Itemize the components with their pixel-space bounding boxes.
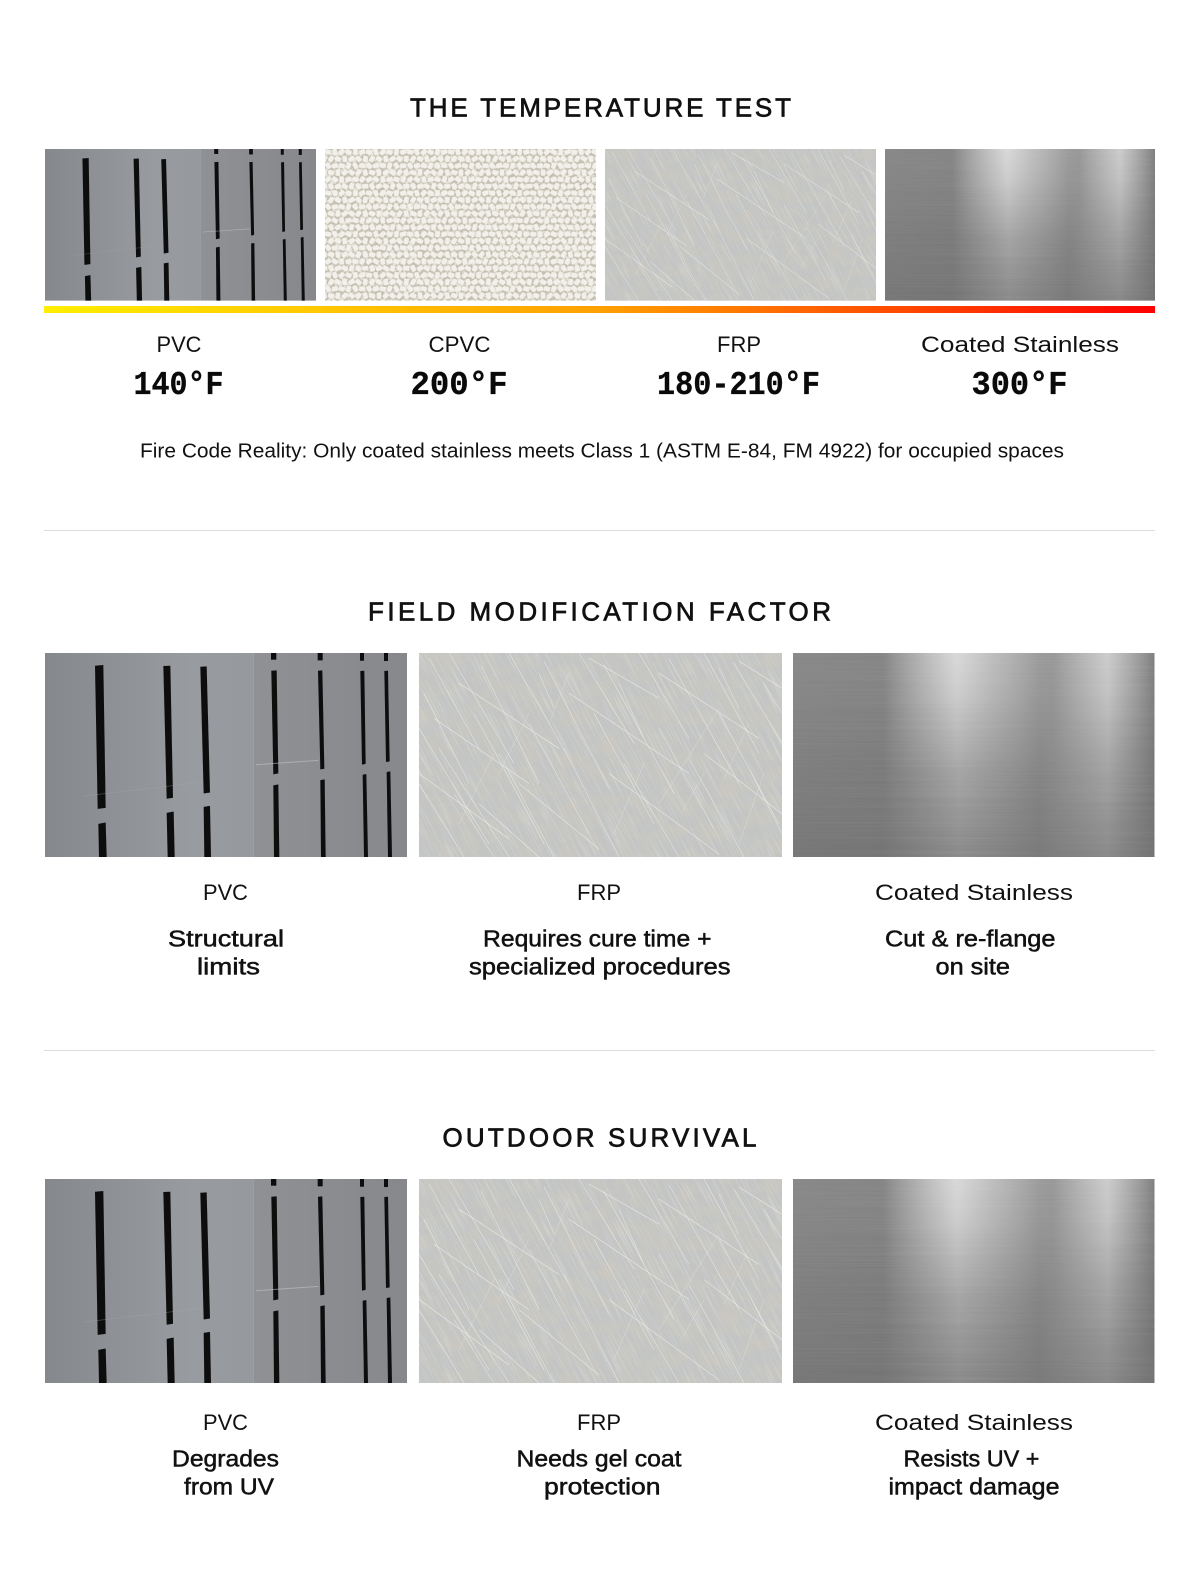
column: FRP outdoor note bbox=[516, 1410, 682, 1500]
image: FRP fiberglass bbox=[331, 1025, 869, 1536]
panel: field modification factor bbox=[45, 499, 1154, 1010]
column: PVC field note: limits bbox=[197, 954, 260, 980]
column: FRP field note: FRP bbox=[577, 880, 621, 905]
column: CPVC temperature: CPVC bbox=[428, 332, 491, 357]
fire code note: Fire Code Reality: Only coated stainless meets Class 1 (ASTM E-84, FM 4922) for occupied spaces bbox=[140, 440, 1064, 462]
temperature gradient bar bbox=[44, 306, 1155, 313]
image: coated stainless bbox=[793, 653, 1154, 857]
column: PVC field note bbox=[168, 880, 284, 980]
column: PVC field note: PVC bbox=[203, 880, 248, 905]
column: CPVC temperature bbox=[410, 332, 508, 404]
column: PVC temperature: PVC bbox=[156, 332, 202, 357]
column: FRP outdoor note: FRP bbox=[577, 1410, 621, 1435]
image: FRP fiberglass bbox=[539, 34, 941, 415]
column: FRP outdoor note: Needs gel coat bbox=[516, 1446, 682, 1472]
column: PVC temperature bbox=[134, 332, 224, 404]
column: coated stainless outdoor note: impact damage bbox=[888, 1474, 1060, 1500]
image: PVC panel bbox=[45, 653, 407, 857]
column: CPVC temperature: 200°F bbox=[410, 367, 508, 404]
column: FRP temperature: 180-210°F bbox=[657, 367, 820, 404]
column: PVC field note: Structural bbox=[168, 926, 284, 952]
column: coated stainless temperature: Coated Stainless bbox=[921, 332, 1119, 357]
column: FRP outdoor note: protection bbox=[544, 1474, 660, 1500]
panel: the temperature test bbox=[44, 34, 1155, 462]
column: coated stainless field note bbox=[875, 880, 1073, 980]
heading: outdoor survival: OUTDOOR SURVIVAL bbox=[442, 1122, 756, 1152]
column: FRP temperature bbox=[657, 332, 820, 404]
column: coated stainless outdoor note: Coated Stainless bbox=[875, 1410, 1073, 1435]
column: coated stainless temperature: 300°F bbox=[972, 367, 1068, 404]
column: coated stainless field note: Cut & re-flange bbox=[885, 926, 1056, 952]
column: PVC outdoor note: from UV bbox=[184, 1474, 275, 1500]
column: FRP field note bbox=[469, 880, 730, 980]
image: PVC panel bbox=[45, 1179, 407, 1383]
column: FRP field note: specialized procedures bbox=[469, 954, 730, 980]
image: CPVC pellets bbox=[325, 149, 596, 301]
column: PVC temperature: 140°F bbox=[134, 367, 224, 404]
column: FRP field note: Requires cure time + bbox=[483, 926, 712, 952]
column: coated stainless outdoor note: Resists UV + bbox=[904, 1446, 1040, 1472]
image: coated stainless bbox=[885, 149, 1155, 301]
column: coated stainless field note: Coated Stainless bbox=[875, 880, 1073, 905]
image: PVC panel bbox=[45, 149, 316, 301]
panel: outdoor survival bbox=[45, 1025, 1154, 1536]
column: PVC outdoor note: PVC bbox=[203, 1410, 248, 1435]
column: PVC outdoor note bbox=[172, 1410, 279, 1500]
column: PVC outdoor note: Degrades bbox=[172, 1446, 279, 1472]
image: FRP fiberglass bbox=[331, 499, 869, 1010]
heading: field modification factor: FIELD MODIFICATION FACTOR bbox=[368, 597, 831, 627]
image: coated stainless bbox=[793, 1179, 1154, 1383]
heading: the temperature test: THE TEMPERATURE TEST bbox=[410, 92, 791, 122]
column: coated stainless temperature bbox=[921, 332, 1119, 404]
column: coated stainless outdoor note bbox=[875, 1410, 1073, 1500]
column: FRP temperature: FRP bbox=[717, 332, 761, 357]
column: coated stainless field note: on site bbox=[936, 954, 1010, 980]
